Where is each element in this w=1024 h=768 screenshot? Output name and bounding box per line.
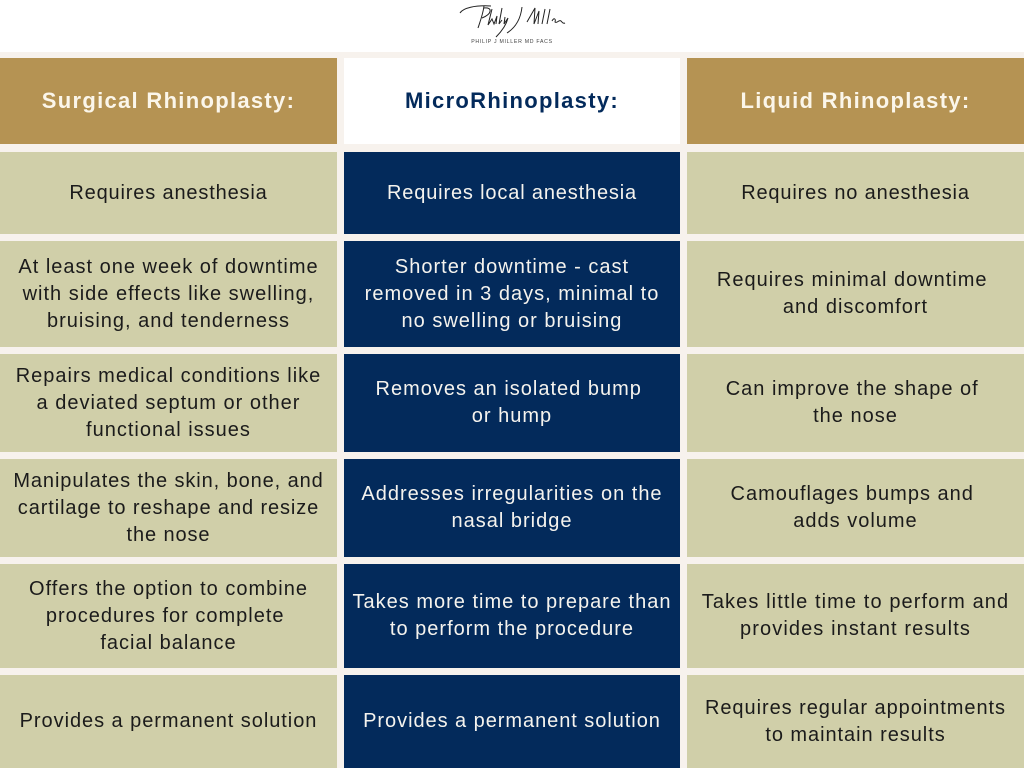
row 4 liquid: adds volume: [793, 510, 918, 532]
header: Liquid Rhinoplasty: [687, 58, 1024, 144]
row 6 liquid: to maintain results: [765, 724, 946, 746]
row 3 surgical: Repairs medical conditions like: [16, 364, 321, 386]
row 6 surgical: [0, 675, 337, 768]
row 4 surgical: [0, 459, 337, 557]
row 3 surgical: a deviated septum or other: [37, 392, 300, 414]
row 5 surgical: procedures for complete: [46, 604, 285, 626]
header: MicroRhinoplasty: MicroRhinoplasty:: [405, 88, 619, 112]
header: Surgical Rhinoplasty: [0, 58, 337, 144]
row 5 surgical: Offers the option to combine: [29, 578, 308, 600]
row 4 micro: nasal bridge: [452, 510, 572, 532]
header: Liquid Rhinoplasty: Liquid Rhinoplasty:: [740, 88, 970, 112]
row 3 liquid: Can improve the shape of: [726, 378, 979, 400]
row 2 surgical: [0, 241, 337, 347]
row 3 micro: Removes an isolated bump: [376, 378, 642, 400]
row 2 liquid: [687, 241, 1024, 347]
row 4 micro: Addresses irregularities on the: [361, 483, 663, 505]
row 1 micro: Requires local anesthesia: [387, 182, 637, 204]
row 3 liquid: [687, 354, 1024, 452]
row 2 surgical: with side effects like swelling,: [23, 282, 314, 304]
row 3 liquid: the nose: [813, 405, 898, 427]
row 6 micro: [344, 675, 680, 768]
row 3 surgical: functional issues: [86, 418, 251, 440]
header: Surgical Rhinoplasty: Surgical Rhinoplasty:: [42, 88, 295, 112]
header: MicroRhinoplasty: [344, 58, 680, 144]
row 5 liquid: [687, 564, 1024, 668]
row 5 micro: to perform the procedure: [390, 618, 634, 640]
row 5 micro: Takes more time to prepare than: [353, 591, 671, 613]
row 2 micro: removed in 3 days, minimal to: [365, 282, 659, 304]
row 1 micro: [344, 152, 680, 234]
row 4 surgical: cartilage to reshape and resize: [18, 496, 319, 518]
row 2 liquid: Requires minimal downtime: [717, 269, 988, 291]
row 6 surgical: Provides a permanent solution: [20, 710, 317, 732]
row 1 liquid: Requires no anesthesia: [741, 182, 970, 204]
row 4 liquid: [687, 459, 1024, 557]
row 3 micro: or hump: [472, 405, 552, 427]
row 3 surgical: [0, 354, 337, 452]
row 5 micro: [344, 564, 680, 668]
row 1 liquid: [687, 152, 1024, 234]
row 2 surgical: bruising, and tenderness: [47, 310, 290, 332]
row 1 surgical: [0, 152, 337, 234]
row 5 surgical: facial balance: [100, 632, 237, 654]
row 6 micro: Provides a permanent solution: [363, 710, 661, 732]
row 5 surgical: [0, 564, 337, 668]
row 2 liquid: and discomfort: [783, 296, 928, 318]
logo: signature: [460, 5, 566, 45]
row 2 micro: no swelling or bruising: [402, 310, 622, 332]
row 6 liquid: [687, 675, 1024, 768]
row 5 liquid: provides instant results: [740, 618, 971, 640]
row 2 surgical: At least one week of downtime: [18, 256, 319, 278]
logo: signature: PHILIP J MILLER MD FACS: [471, 39, 553, 45]
row 4 surgical: the nose: [127, 524, 210, 546]
row 4 micro: [344, 459, 680, 557]
row 6 liquid: Requires regular appointments: [705, 696, 1006, 718]
row 5 liquid: Takes little time to perform and: [702, 591, 1009, 613]
row 1 surgical: Requires anesthesia: [69, 182, 268, 204]
row 2 micro: [344, 241, 680, 347]
row 2 micro: Shorter downtime - cast: [395, 256, 629, 278]
row 3 micro: [344, 354, 680, 452]
row 4 liquid: Camouflages bumps and: [731, 483, 974, 505]
row 4 surgical: Manipulates the skin, bone, and: [13, 470, 324, 492]
